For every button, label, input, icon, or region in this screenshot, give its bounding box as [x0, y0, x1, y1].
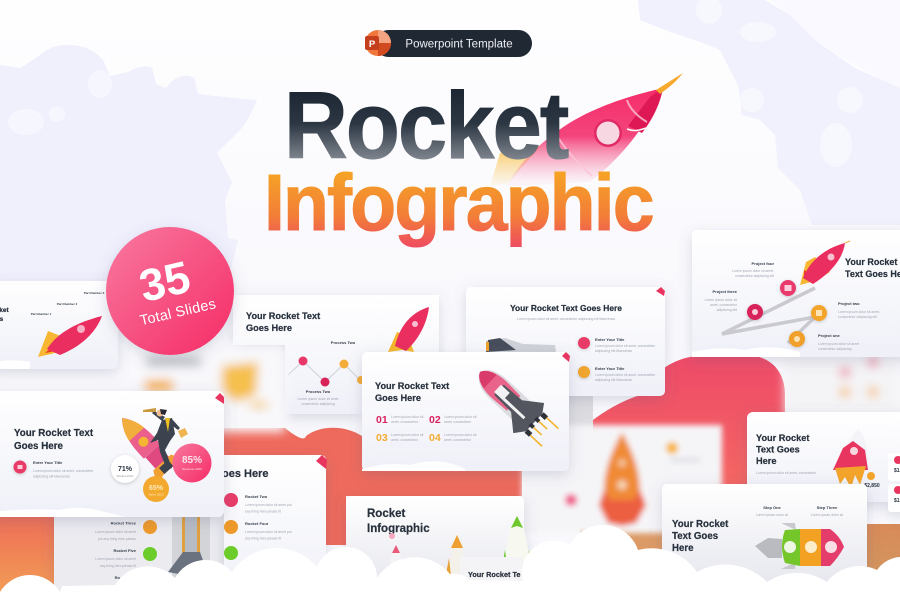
blurred slide: left map — [135, 346, 285, 432]
mini cards — [888, 453, 900, 512]
coloured backdrop: red arch — [590, 356, 785, 500]
heading: Goes Here — [246, 323, 292, 333]
node two — [811, 301, 880, 321]
item 1: Lorem ipsum dolor sit amet, consectetur — [595, 344, 656, 348]
slide: grey bottom left — [54, 510, 226, 600]
rows: Ro — [115, 575, 121, 580]
stat — [864, 472, 880, 489]
item: Enter Your Title — [33, 460, 63, 465]
heading: Rocket — [367, 508, 406, 520]
node three: amet, consectetur — [710, 303, 738, 307]
node four — [732, 261, 796, 296]
list: Lorem ipsum dolor sit amet put — [245, 503, 292, 507]
coloured strip under centre rocket — [580, 528, 665, 552]
shuttle — [465, 357, 565, 454]
title: Infographic: Infographic — [264, 159, 653, 248]
heading: Goes Here — [14, 441, 64, 452]
corner tag — [656, 287, 665, 296]
list: any thing here please fit — [245, 536, 281, 540]
list — [224, 493, 292, 560]
slide: bottom small — [460, 557, 523, 587]
heading: Your Rocket — [672, 519, 729, 530]
body: Lorem ipsum dolor sit amet, consectetur — [756, 471, 817, 475]
rows: Lorem ipsum dolor sit amet — [95, 557, 136, 561]
node two: Lorem ipsum dolor sit amet, — [838, 310, 880, 314]
item 2: Lorem ipsum dolor sit amet, consectetur — [595, 373, 656, 377]
rocket illustration behind title — [490, 73, 683, 186]
numbers: amet, consectetur — [391, 438, 419, 442]
numbers: amet, consectetur — [391, 420, 419, 424]
numbers: Lorem ipsum dolor sit — [391, 433, 423, 437]
cloud strip — [0, 360, 30, 369]
slide: steps rocket — [662, 484, 867, 600]
rows: Rocket Five — [114, 548, 137, 553]
coloured backdrop: bottom right — [860, 524, 900, 594]
numbers: amet, consectetur — [444, 438, 472, 442]
slide: achievement stats — [0, 391, 224, 517]
heading: oes Here — [222, 468, 268, 480]
node one: consectetur adipiscing — [818, 347, 852, 351]
heading: Your Rocket Text — [375, 381, 449, 391]
heading: Here — [756, 456, 776, 466]
line chart — [288, 356, 365, 406]
item — [14, 460, 94, 478]
list: Lorem ipsum dolor sit amet put — [245, 530, 292, 534]
stat 71%: Market 2020 — [117, 474, 134, 478]
heading: Your Rocket — [756, 433, 809, 443]
label: Powerpoint Template — [405, 38, 513, 50]
coloured backdrop: coral panel — [224, 428, 522, 545]
shuttle — [486, 338, 556, 352]
numbers: 01 — [376, 414, 388, 426]
stat 71%: 71% — [118, 466, 133, 473]
line chart: consectetur adipiscing — [301, 402, 335, 406]
item: adipiscing elit Maecenas — [33, 474, 70, 478]
item 1: adipiscing elit Maecenas — [595, 349, 632, 353]
node three: Lorem ipsum dolor sit — [705, 298, 737, 302]
tower rocket — [168, 517, 210, 582]
list: Rocket Two — [245, 494, 268, 499]
heading: Your Rocket — [845, 257, 897, 267]
step labels: Step Three — [817, 505, 838, 510]
numbers: Lorem ipsum dolor sit — [444, 433, 476, 437]
corner tag — [562, 352, 570, 362]
stat 65% — [143, 476, 169, 502]
path — [722, 288, 815, 343]
node three — [705, 289, 763, 320]
rows: Lorem ipsum dolor sit amet — [95, 530, 136, 534]
numbers: 04 — [429, 432, 441, 444]
list: Rocket Four — [245, 521, 269, 526]
stat 65%: 65% — [149, 485, 164, 492]
item 2 — [578, 366, 656, 382]
heading: Your Rocket Text — [246, 311, 320, 321]
cloud strip — [692, 347, 800, 357]
segmented rocket — [755, 523, 844, 569]
corner tag — [316, 455, 327, 469]
numbers: 03 — [376, 432, 388, 444]
node two: Project two — [838, 301, 860, 306]
clouds foreground — [0, 525, 900, 600]
part labels: Part Number 3 — [84, 291, 105, 295]
template pill — [365, 30, 532, 57]
slide: part numbers rocket — [0, 281, 118, 369]
slide: Rocket Infographic — [346, 496, 535, 600]
icon: rocket — [388, 307, 429, 352]
part labels: Part Number 1 — [31, 312, 52, 316]
node four: Project four — [752, 261, 774, 266]
heading: Text Goes — [672, 531, 718, 542]
number: 35 — [135, 251, 195, 312]
blurred slide: top right lists — [785, 356, 900, 416]
title: Rocket: Rocket — [284, 73, 569, 179]
cloud strip — [362, 461, 465, 471]
stat 85% — [172, 444, 212, 482]
numbers: 02 — [429, 414, 441, 426]
corner tag — [215, 393, 224, 404]
stat 85%: 85% — [182, 455, 202, 466]
item: Lorem ipsum dolor sit amet, consectetur — [33, 469, 94, 473]
heading: Your Rocket Te — [468, 570, 520, 579]
node one — [789, 331, 859, 351]
rows: put any thing here please — [98, 537, 136, 541]
node three: adipiscing elit — [717, 308, 737, 312]
rows: any thing here please fit — [100, 564, 136, 568]
node one: Lorem ipsum dolor sit amet — [818, 342, 859, 346]
heading: Text Goes — [756, 444, 800, 454]
node four: Lorem ipsum dolor sit amet, — [732, 269, 774, 273]
rows: Rocket Three — [111, 520, 137, 526]
node four: consectetur adipiscing elit — [735, 274, 774, 278]
label: Process Two — [331, 340, 356, 345]
slide: process chart — [233, 295, 439, 414]
heading: Your Rocket Text Goes Here — [510, 303, 622, 313]
stat: $2,850 — [864, 483, 880, 489]
item 2: Enter Your Title — [595, 366, 625, 371]
node one: Project one — [818, 333, 841, 338]
heading: Here — [672, 543, 694, 554]
stat 85%: Revenue 2020 — [182, 467, 202, 471]
cloud strip — [0, 508, 125, 517]
numbers: amet, consectetur — [444, 420, 472, 424]
line chart: Process Two — [306, 389, 331, 394]
slide: Goes Here list — [222, 455, 327, 600]
step labels: Lorem ipsum dolor sit — [756, 513, 788, 517]
rocket — [800, 241, 850, 285]
badge: 35 total slides — [106, 227, 234, 355]
small rockets — [389, 516, 535, 585]
lavender paint blobs — [0, 0, 900, 285]
numbers — [376, 414, 476, 444]
node three: Project three — [713, 289, 738, 294]
slide: shuttle two items — [466, 287, 665, 396]
icon: PowerPoint: P — [369, 39, 376, 50]
item 2: adipiscing elit Maecenas — [595, 378, 632, 382]
stat 65%: Sales 2020 — [148, 492, 164, 496]
line chart: Lorem ipsum dolor sit amet — [298, 397, 338, 401]
step labels — [756, 505, 843, 517]
part labels — [31, 291, 105, 316]
step labels: Step One — [763, 505, 782, 510]
numbers: Lorem ipsum dolor sit — [444, 415, 476, 419]
step labels: Lorem ipsum dolor sit — [811, 513, 843, 517]
heading: Goes Here — [375, 393, 421, 403]
list: any thing here please fit — [245, 510, 281, 514]
item 1: Enter Your Title — [595, 337, 625, 342]
subtitle: Lorem ipsum dolor sit amet, consectetur adipiscing elit Maecenas — [517, 317, 615, 321]
coloured backdrop: left orange — [0, 510, 56, 600]
rows — [95, 520, 137, 580]
rocket and man — [107, 405, 188, 488]
slide: rocket stats — [747, 412, 900, 512]
icon: PowerPoint — [365, 30, 391, 56]
rocket — [38, 316, 102, 357]
heading: Your Rocket Text — [14, 428, 94, 439]
caption: Total Slides — [138, 296, 218, 329]
slide: numbered shuttle — [362, 352, 570, 471]
node two: consectetur adipiscing elit — [838, 315, 877, 319]
stat 71% — [111, 455, 139, 483]
rocket — [833, 429, 870, 490]
item 1 — [578, 337, 656, 353]
slide: right rocket path — [692, 230, 900, 357]
blurred slide: centre rocket — [522, 425, 722, 533]
heading: Infographic — [367, 523, 430, 535]
part labels: Part Number 2 — [57, 302, 78, 306]
coloured backdrop: grey shade — [560, 395, 593, 435]
numbers: Lorem ipsum dolor sit — [391, 415, 423, 419]
